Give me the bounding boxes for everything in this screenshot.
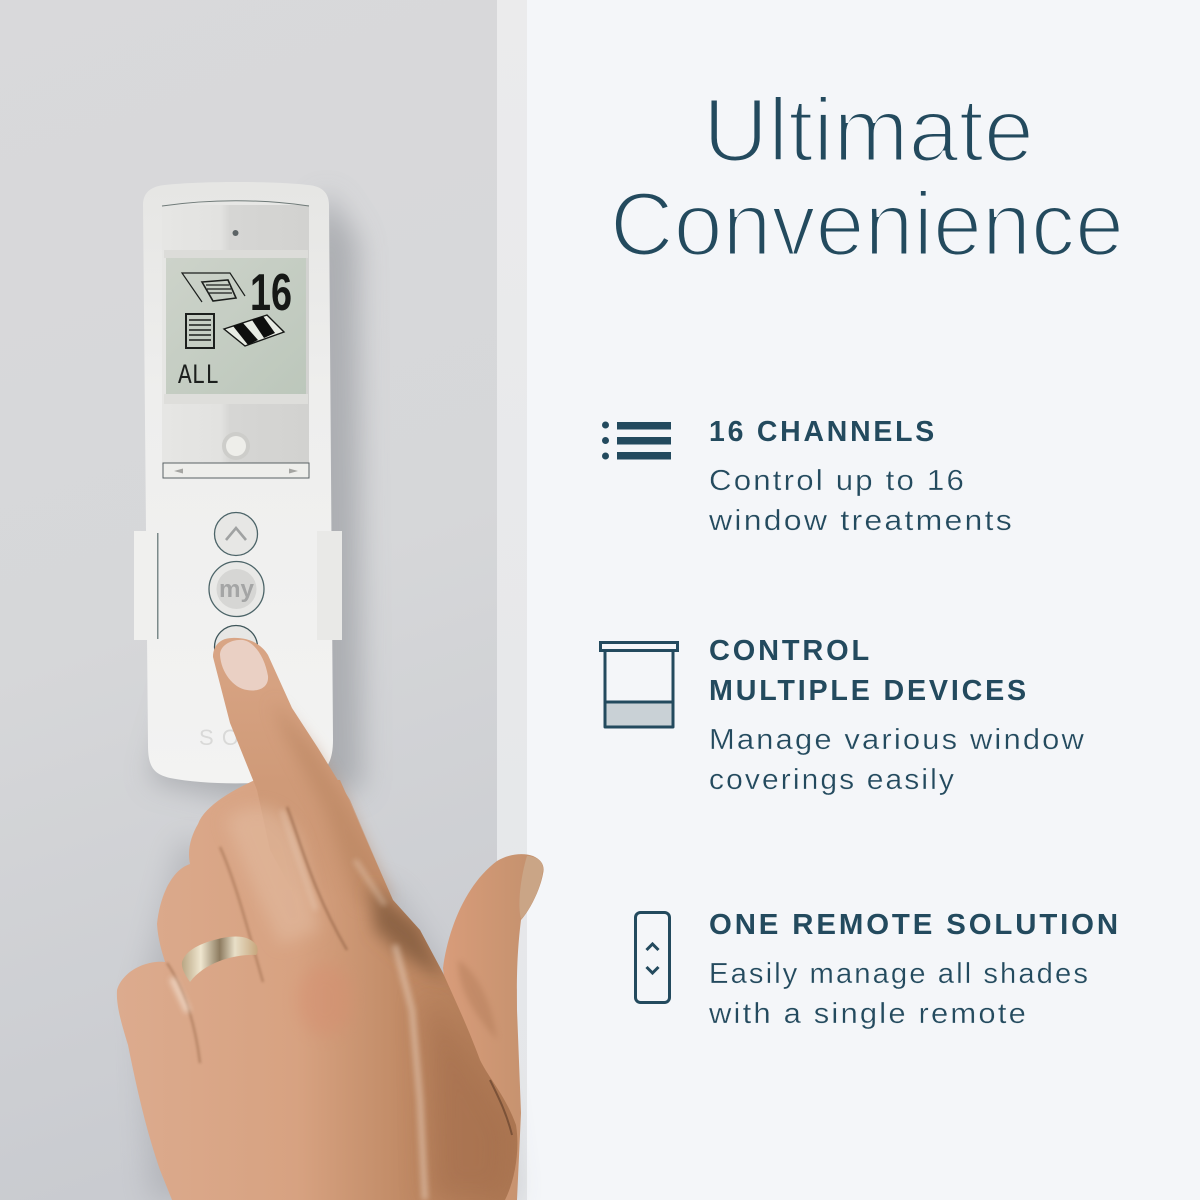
hand shading (167, 807, 515, 1200)
remote window (162, 201, 309, 478)
warm knuckle blush (297, 964, 353, 1036)
finger separation lines (287, 807, 347, 950)
specular highlight finger (282, 810, 316, 910)
right side shade (425, 1016, 503, 1199)
finger upper shading (272, 700, 392, 905)
indicator light (232, 230, 238, 236)
LCD shutter icon (186, 314, 214, 348)
specular highlight right (395, 945, 425, 1200)
heading: MULTIPLE DEVICES (709, 675, 1029, 707)
LCD display (166, 258, 306, 394)
description: coverings easily (709, 764, 956, 796)
icon: remote (636, 912, 670, 1002)
my button (209, 562, 264, 616)
specular highlight upper (355, 860, 385, 905)
finger highlight left (225, 807, 320, 945)
thumb-palm crease (490, 1080, 512, 1135)
heading: CONTROL (709, 635, 872, 667)
icon: list (602, 422, 671, 460)
fingernail (220, 640, 268, 690)
description: Control up to 16 (709, 465, 966, 497)
down button (214, 626, 258, 668)
description: window treatments (708, 505, 1014, 537)
up button (214, 512, 258, 556)
remote control on wall (134, 182, 362, 800)
thumb nail (519, 856, 543, 919)
description (709, 724, 1086, 796)
feature: 16 channels (602, 416, 1014, 537)
title (610, 81, 1124, 275)
finger and back of hand (117, 780, 517, 1200)
background: grey wall (0, 0, 497, 1200)
LCD label ALL: ALL (178, 361, 219, 392)
heading (709, 635, 1029, 707)
description: Easily manage all shades (709, 958, 1090, 990)
wall edge strip (497, 0, 527, 1200)
index finger (213, 638, 395, 905)
remote shadow (150, 195, 362, 800)
LCD number 16: 16 (250, 264, 292, 322)
description: with a single remote (708, 998, 1028, 1030)
wedding ring (182, 937, 258, 982)
slider bar (163, 463, 309, 478)
LCD skylight icon (182, 273, 245, 302)
thumb (443, 854, 544, 1200)
pinky highlight (172, 978, 188, 1012)
remote body (143, 182, 333, 783)
thumb shading (458, 960, 497, 1040)
heading: 16 CHANNELS (709, 416, 937, 448)
title: Ultimate (703, 81, 1034, 181)
feature: one remote solution (636, 909, 1121, 1030)
description (708, 465, 1014, 537)
LCD awning icon (224, 315, 284, 346)
my button: my (219, 576, 255, 603)
description (708, 958, 1090, 1030)
description: Manage various window (709, 724, 1086, 756)
slider knob (222, 432, 250, 460)
title: Convenience (610, 175, 1124, 275)
feature: control multiple devices (600, 635, 1086, 796)
brand logotype: SO (199, 725, 239, 750)
pointing hand (117, 638, 544, 1200)
icon: window shade (600, 642, 678, 728)
right text panel (527, 0, 1200, 1200)
heading: ONE REMOTE SOLUTION (709, 909, 1121, 941)
side clips (134, 531, 342, 640)
hand shadow on wall (140, 840, 515, 1200)
dark knuckle shade (370, 885, 445, 980)
